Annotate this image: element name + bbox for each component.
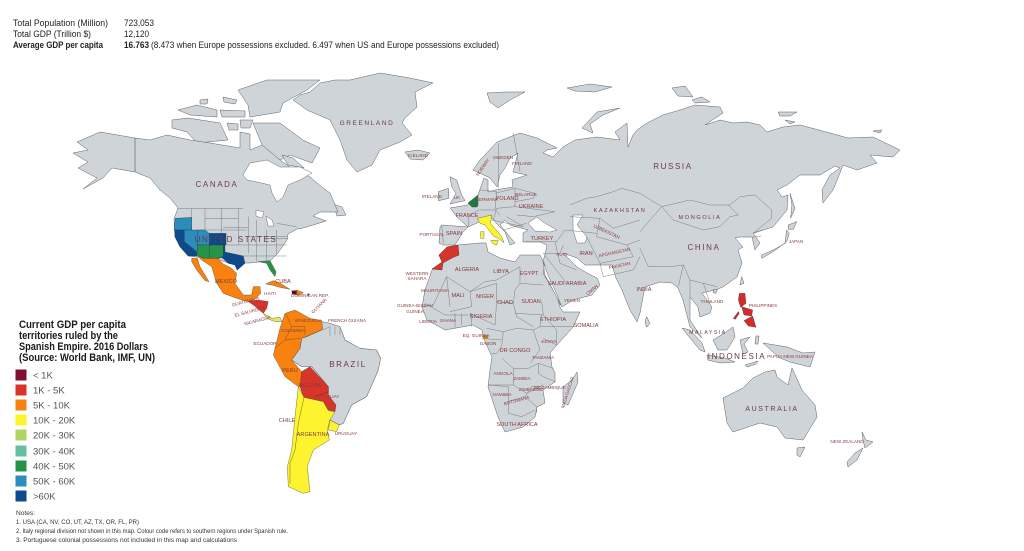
legend title: (Source: World Bank, IMF, UN): [19, 352, 155, 364]
small country labels: BELARUS: [515, 192, 537, 197]
small country labels: PAKISTAN: [608, 261, 631, 270]
summary statistics text block: Total Population (Million): [13, 18, 108, 28]
medium country labels: DR CONGO: [500, 348, 531, 354]
medium country labels: CUBA: [275, 279, 291, 285]
large country labels: GREENLAND: [340, 120, 394, 127]
medium country labels: IRAN: [579, 251, 593, 257]
legend swatches and labels: 10K - 20K: [33, 416, 76, 426]
small country labels: IRAQ: [556, 252, 568, 257]
medium country labels: ARGENTINA: [297, 432, 330, 438]
small country labels: URUGUAY: [335, 431, 357, 436]
medium country labels: UKRAINE: [519, 204, 544, 210]
small country labels: ANGOLA: [493, 371, 514, 376]
small country labels: FINLAND: [512, 161, 533, 166]
medium country labels: FRANCE: [456, 213, 479, 219]
small country labels: NEW ZEALAND: [830, 439, 864, 444]
Africa: [422, 243, 580, 432]
small country labels: BOTSWANA: [503, 395, 531, 406]
medium country labels: SOMALIA: [574, 323, 599, 329]
legend swatches and labels: [16, 370, 76, 502]
New Mexico: [209, 245, 223, 258]
USA state boundaries: [175, 208, 297, 262]
small country labels: KENYA: [541, 339, 558, 344]
medium country labels: BOLIVIA: [299, 383, 321, 389]
medium country labels: CHILE: [279, 418, 296, 424]
small country labels: WESTERN: [406, 271, 428, 276]
Costa Rica and Panama: [263, 313, 282, 322]
small country labels: MOZAMBIQUE: [534, 385, 566, 390]
small country labels: EL SALVADOR: [234, 305, 266, 318]
legend title: [19, 319, 155, 364]
small country labels: OMAN: [585, 284, 599, 296]
small country labels: ZAMBIA: [513, 376, 531, 381]
Oregon: [174, 217, 192, 230]
Puerto Rico: [307, 293, 310, 296]
small country labels: ICELAND: [408, 153, 429, 158]
small country labels: GERMANY: [475, 197, 499, 202]
small country labels: COLOMBIA: [281, 328, 306, 333]
legend swatches and labels: 50K - 60K: [33, 476, 76, 488]
summary statistics text block: [13, 18, 499, 50]
summary statistics text block: Total GDP (Trillion $): [13, 29, 91, 39]
large country labels: MONGOLIA: [679, 215, 721, 221]
summary statistics text block: 723,053: [124, 18, 154, 28]
small country labels: GUYANA: [310, 297, 328, 314]
small country labels: FRENCH GUIANA: [328, 318, 367, 323]
medium country labels: EGYPT: [520, 271, 539, 277]
small country labels: HAITI: [264, 291, 276, 296]
small country labels: VENEZUELA: [294, 318, 323, 323]
legend swatches and labels: 40K - 50K: [33, 462, 76, 472]
small country labels: PAPUA NEW GUINEA: [767, 354, 814, 359]
national borders in Africa: [422, 267, 575, 417]
small country labels: [231, 153, 864, 444]
summary statistics text block: Average GDP per capita: [13, 40, 103, 50]
medium country labels: CHAD: [497, 300, 513, 306]
Venezuela, Colombia, Ecuador, Peru: [273, 310, 323, 387]
small country labels: AFGHANISTAN: [598, 247, 631, 258]
Nevada: [184, 230, 197, 252]
large country labels: UNITED STATES: [195, 235, 277, 244]
notes: 1. USA (CA, NV, CO, UT, AZ, TX, OR, FL, PR): [16, 519, 139, 526]
Chile and Argentina: [287, 387, 335, 493]
California: [175, 230, 197, 256]
Uruguay: [328, 420, 339, 432]
Utah: [197, 230, 209, 245]
Florida: [258, 261, 276, 277]
medium country labels: LIBYA: [493, 269, 509, 275]
small country labels: DOMINICAN REP.: [291, 293, 329, 298]
Mexico, Central America and Caribbean: [192, 256, 310, 302]
small country labels: GUINEA-BISSAU: [397, 303, 433, 308]
small country labels: MAURITANIA: [421, 288, 450, 293]
legend swatches and labels: < 1K: [33, 370, 53, 382]
medium country labels: SPAIN: [446, 231, 462, 237]
small country labels: THAILAND: [701, 299, 724, 304]
large country labels: AUSTRALIA: [745, 406, 799, 413]
Australia and New Zealand: [723, 368, 873, 467]
legend swatches and labels: 5K - 10K: [33, 400, 71, 412]
small country labels: PHILIPPINES: [749, 303, 777, 308]
medium country labels: SUDAN: [521, 299, 541, 305]
Central America north: [248, 300, 268, 313]
small country labels: TANZANIA: [532, 355, 555, 360]
Cuba: [266, 281, 290, 289]
Baja California: [192, 258, 209, 282]
large country labels: KAZAKHSTAN: [594, 208, 646, 214]
Mexico: [197, 256, 261, 302]
small country labels: YEMEN: [564, 298, 580, 303]
landmass: Greenland and Arctic islands: [172, 73, 433, 216]
medium country labels: SOUTH AFRICA: [496, 422, 538, 428]
notes: 3. Portuguese colonial possessions not included in this map and calculations: [16, 537, 238, 544]
large country labels: INDONESIA: [708, 352, 766, 361]
Morocco: [432, 245, 459, 270]
small country labels: NAMIBIA: [493, 392, 512, 397]
small country labels: MADAGASCAR: [560, 376, 575, 409]
medium country labels: INDIA: [637, 287, 652, 293]
small country labels: ECUADOR: [254, 341, 277, 346]
legend swatches and labels: >60K: [33, 492, 56, 502]
Italy: [477, 215, 504, 245]
legend title: Current GDP per capita: [19, 319, 127, 331]
legend title: territories ruled by the: [19, 330, 118, 342]
Arizona: [197, 245, 209, 258]
US states coloured by GDP band: [174, 217, 276, 277]
small country labels: GUATEMALA: [231, 295, 261, 308]
Eurasia: [439, 84, 900, 338]
landmass: North America: [73, 132, 338, 270]
large country labels: CHINA: [688, 243, 720, 252]
medium country labels: MALI: [451, 293, 465, 299]
small country labels: IRELAND: [422, 194, 443, 199]
small country labels: NORWAY: [475, 157, 491, 177]
medium country labels: ETHIOPIA: [540, 317, 566, 323]
large country labels: CANADA: [196, 180, 238, 189]
small country labels: PARAGUAY: [315, 394, 339, 399]
summary statistics text block: 16.763: [124, 40, 149, 50]
small country labels: LIBERIA: [419, 319, 438, 324]
medium country labels: TURKEY: [531, 236, 554, 242]
medium country labels: PERU: [282, 368, 298, 374]
legend swatches and labels: 20K - 30K: [33, 430, 76, 442]
large country labels: RUSSIA: [653, 162, 693, 171]
small country labels: SWEDEN: [493, 155, 513, 160]
world map: [73, 73, 900, 493]
legend swatches and labels: 1K - 5K: [33, 386, 65, 396]
national borders in Europe and the Middle East: [442, 133, 640, 283]
summary statistics text block: (8.473 when Europe possessions excluded. 6.497 when US and Europe possessions excluded): [151, 40, 499, 50]
small country labels: SAHARA: [408, 276, 427, 281]
Dominican Republic: [297, 290, 303, 295]
notes: Notes:: [16, 510, 35, 517]
small country labels: GUINEA: [406, 309, 425, 314]
small country labels: JAPAN: [789, 239, 803, 244]
Bolivia and Paraguay: [300, 367, 336, 412]
small country labels: ZIMBABWE: [519, 387, 543, 392]
small country labels: GABON: [480, 341, 496, 346]
Indonesia and Malaysia islands: [682, 327, 815, 367]
summary statistics text block: 12,120: [124, 29, 149, 39]
large country labels: MALAYSIA: [689, 330, 727, 336]
legend swatches and labels: 30K - 40K: [33, 446, 76, 458]
small country labels: EQ. GUINEA: [463, 333, 490, 338]
medium country labels: SAUDI ARABIA: [548, 281, 587, 287]
notes: 2. Italy regional division not shown in this map. Colour code refers to southern regions under Spanish rule.: [16, 528, 288, 535]
medium country labels: NIGER: [476, 294, 494, 300]
small country labels: GHANA: [440, 318, 457, 323]
medium country labels: POLAND: [495, 196, 519, 202]
British Isles: [438, 177, 465, 204]
Equatorial Guinea: [483, 335, 488, 339]
small country labels: NICARAGUA: [244, 314, 272, 327]
medium country labels: NIGERIA: [469, 314, 493, 320]
medium country labels: ALGERIA: [455, 267, 479, 273]
Colorado: [209, 233, 226, 245]
Brazil and Guianas: [292, 322, 381, 425]
large country labels: [195, 120, 799, 413]
Texas: [217, 245, 245, 270]
small country labels: UZBEKISTAN: [593, 223, 621, 240]
small country labels: PORTUGAL: [419, 232, 445, 237]
legend title: Spanish Empire. 2016 Dollars: [19, 341, 148, 353]
medium country labels: [215, 196, 652, 438]
large country labels: BRAZIL: [329, 360, 367, 369]
medium country labels: MEXICO: [215, 279, 238, 285]
Belgium and Netherlands: [468, 195, 478, 207]
Red Sea: [543, 262, 561, 305]
Philippines: [733, 293, 756, 327]
Haiti: [292, 290, 297, 295]
South America: [248, 300, 381, 493]
national borders in China, Mongolia and Southeast Asia: [640, 193, 772, 303]
notes: [16, 510, 288, 544]
Japan, Taiwan and Sri Lanka: [645, 193, 797, 327]
small country labels: UK: [454, 195, 461, 200]
